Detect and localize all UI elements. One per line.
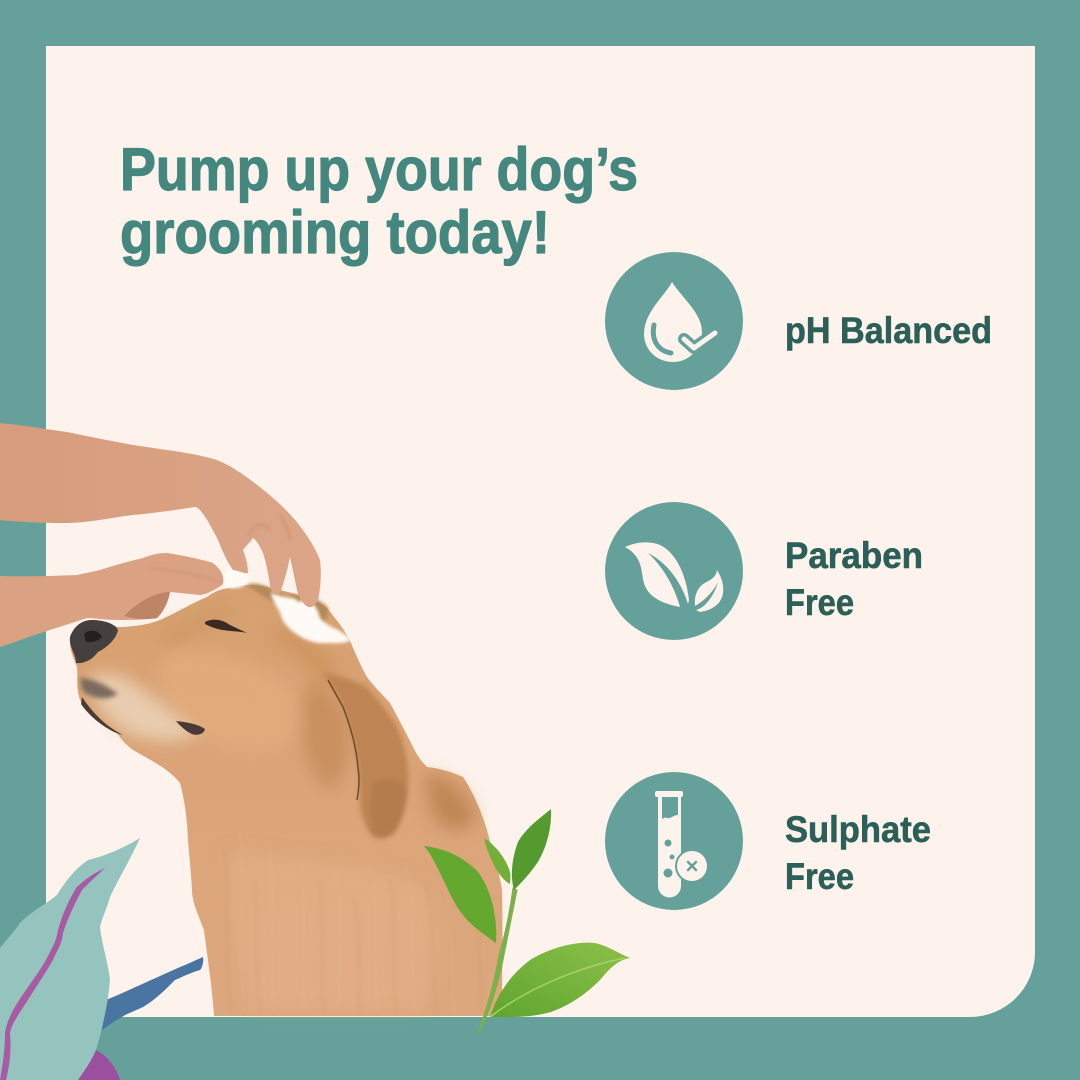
title: Pump up your dog’s <box>120 136 638 203</box>
knuckle shading <box>248 515 290 540</box>
leaf: small <box>484 838 510 884</box>
upper arm and hand <box>0 423 321 607</box>
stem <box>478 888 517 1033</box>
dog body and head <box>70 585 502 1016</box>
label: Sulphate Free <box>785 809 931 897</box>
ear <box>323 673 408 838</box>
feature: paraben free <box>605 502 923 640</box>
mouth <box>81 697 205 735</box>
label: Paraben Free: Free <box>785 582 854 623</box>
finger line <box>150 568 222 583</box>
eye <box>205 620 247 633</box>
title: grooming today! <box>120 199 550 266</box>
dog photo illustration <box>0 423 502 1016</box>
light teal leaf <box>0 838 140 1080</box>
icon: leaves <box>605 502 743 640</box>
label: Sulphate Free: Free <box>785 856 854 897</box>
leaf: upper <box>512 809 551 890</box>
lower arm and hand <box>0 553 223 647</box>
icon: test tube <box>605 772 743 910</box>
label: Paraben Free: Paraben <box>785 535 923 576</box>
hand shadow <box>124 592 170 619</box>
leaf: big <box>490 943 630 1017</box>
label: pH Balanced: pH Balanced <box>785 310 992 351</box>
label: Sulphate Free: Sulphate <box>785 809 931 850</box>
nose <box>70 620 118 663</box>
head fur curl <box>246 584 328 622</box>
title <box>120 136 638 266</box>
feature: sulphate free <box>605 772 931 910</box>
leaf: left <box>424 846 496 943</box>
muzzle <box>88 674 200 741</box>
blue leaf <box>102 957 203 1030</box>
leaf vein <box>0 868 105 1080</box>
foam <box>222 568 351 643</box>
label: Paraben Free <box>785 535 923 623</box>
purple leaf <box>78 1050 120 1080</box>
decorative leaves <box>0 838 203 1080</box>
fur shading <box>155 602 475 1010</box>
icon: water drop with check <box>605 252 743 390</box>
fur texture <box>225 830 482 1012</box>
tea sprig <box>424 809 630 1033</box>
feature: pH balanced <box>605 252 992 390</box>
